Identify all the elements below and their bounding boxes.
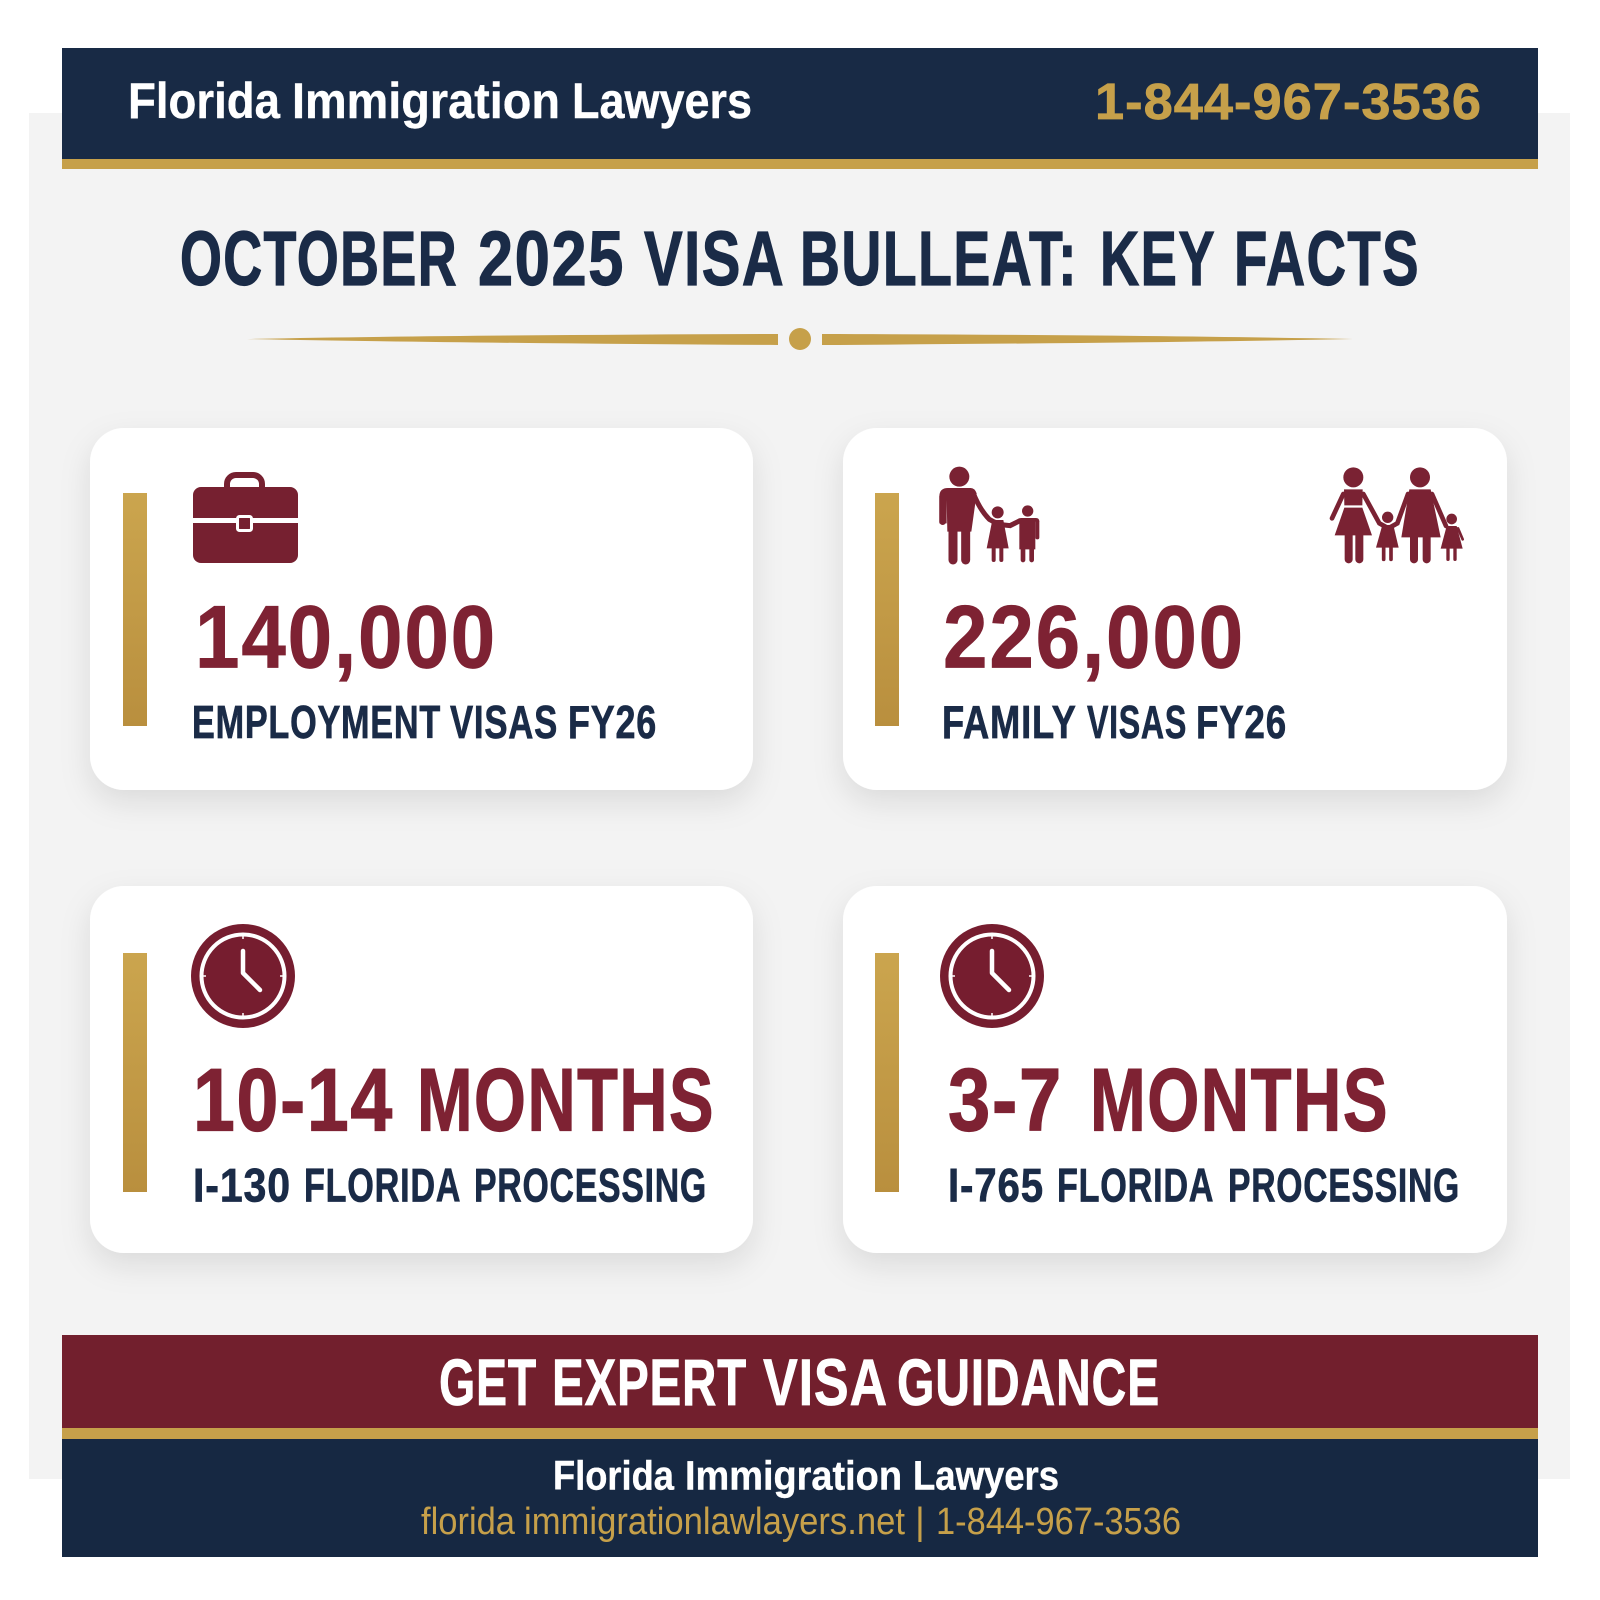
footer firm name: Lawyers [913, 1452, 1059, 1498]
main title: VISA [644, 216, 783, 302]
label: employment visas: EMPLOYMENT [192, 696, 441, 748]
header firm name: Immigration [292, 73, 560, 129]
label: family visas: FAMILY [942, 696, 1076, 748]
footer website and phone: | [915, 1501, 925, 1543]
main title: BULLEAT: [800, 216, 1078, 302]
footer website and phone: florida [421, 1501, 516, 1543]
call to action text: GET [439, 1345, 537, 1419]
main title: FACTS [1234, 216, 1420, 302]
label: employment visas: FY26 [568, 696, 657, 748]
icon: briefcase [193, 475, 298, 563]
header firm name: Florida [128, 73, 281, 129]
stat: 226,000: 226,000 [943, 586, 1245, 686]
accent bar [123, 953, 147, 1192]
accent bar [123, 493, 147, 726]
stat: 10-14 months: 10-14 [193, 1050, 394, 1150]
call to action text: VISA [763, 1345, 886, 1419]
header firm name: Lawyers [572, 73, 752, 129]
panel: I-765 processing [843, 886, 1507, 1253]
label: family visas: FY26 [1196, 696, 1287, 748]
panel: employment visas [90, 428, 753, 790]
stat: 3-7 months: MONTHS [1090, 1050, 1389, 1150]
stat: 140,000: 140,000 [195, 586, 497, 686]
call to action text: EXPERT [552, 1345, 747, 1419]
label: I-765 Florida processing: I-765 [948, 1158, 1044, 1212]
header phone number: 1-844-967-3536 [1095, 73, 1482, 130]
label: family visas: VISAS [1087, 696, 1187, 748]
call to action banner [62, 1335, 1538, 1428]
label: I-765 Florida processing: FLORIDA [1057, 1158, 1213, 1212]
accent bar [875, 493, 899, 726]
main title: 2025 [478, 216, 625, 302]
stat: 10-14 months: MONTHS [417, 1050, 715, 1150]
panel: I-130 processing [90, 886, 753, 1253]
icon: clock [191, 924, 295, 1028]
header band [62, 48, 1538, 169]
footer firm name: Immigration [685, 1452, 902, 1498]
footer firm name: Florida [553, 1452, 675, 1498]
icon: father with two children [939, 467, 1039, 560]
main title: KEY [1100, 216, 1215, 302]
footer band [62, 1428, 1538, 1557]
label: I-765 Florida processing: PROCESSING [1228, 1158, 1460, 1212]
accent bar [875, 953, 899, 1192]
main title: OCTOBER [180, 216, 458, 302]
icon: two mothers with two children [1332, 467, 1463, 559]
call to action text: GUIDANCE [897, 1345, 1160, 1419]
title divider with dot [247, 328, 1353, 350]
label: I-130 Florida processing: FLORIDA [304, 1158, 460, 1212]
icon: clock [940, 924, 1044, 1028]
label: I-130 Florida processing: PROCESSING [474, 1158, 707, 1212]
panel: family visas [843, 428, 1507, 790]
label: employment visas: VISAS [450, 696, 558, 748]
stat: 3-7 months: 3-7 [948, 1050, 1063, 1150]
footer website and phone: immigrationlawlayers.net [524, 1501, 905, 1543]
footer website and phone: 1-844-967-3536 [936, 1501, 1181, 1543]
label: I-130 Florida processing: I-130 [193, 1158, 291, 1212]
